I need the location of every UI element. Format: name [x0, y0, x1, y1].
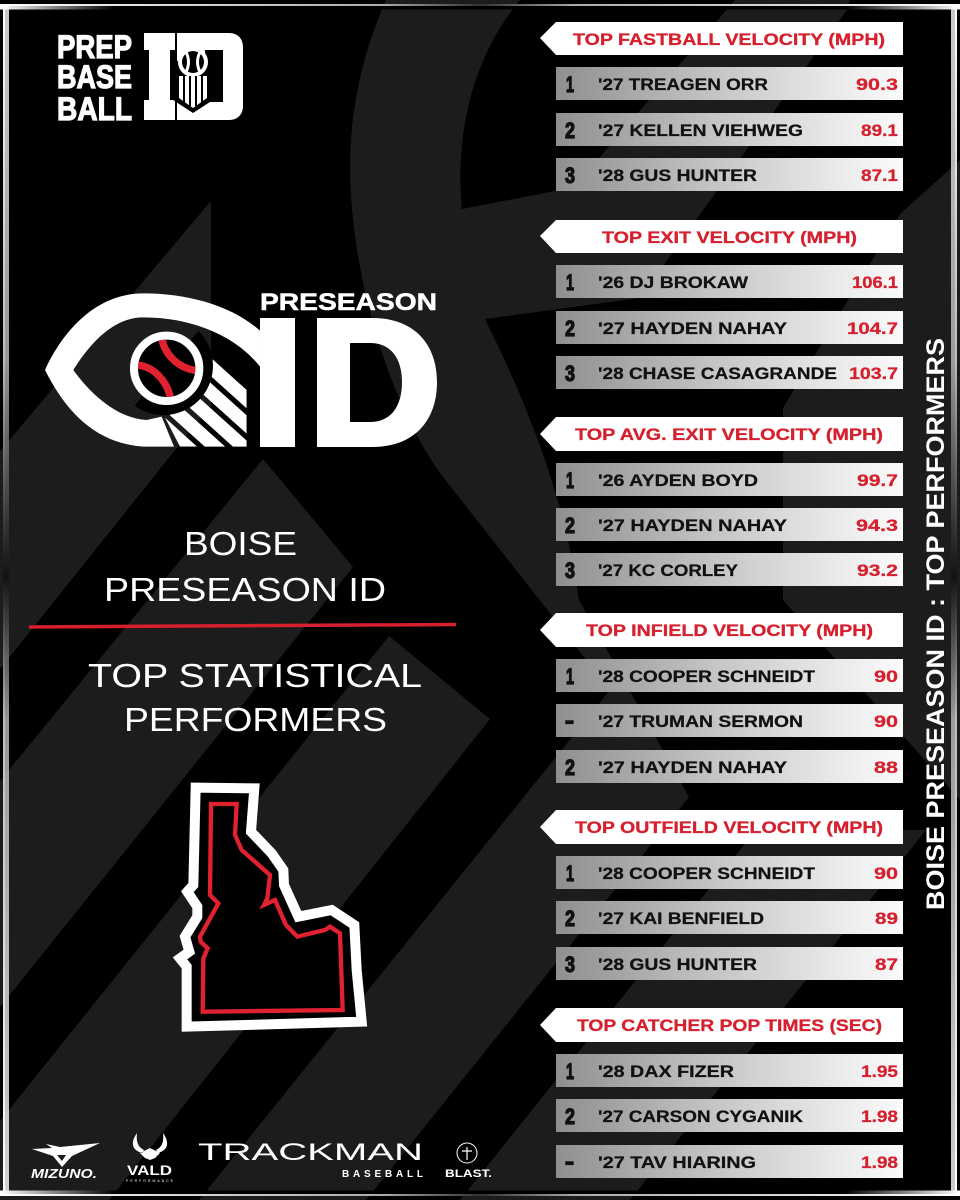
- row: Dax Fizer: [556, 1054, 903, 1087]
- row: Gus Hunter: 87: [875, 956, 898, 974]
- row: DJ Brokaw: '26 DJ BROKAW: [598, 274, 748, 292]
- subtitle: Top Statistical Performers: TOP STATISTICAL: [88, 657, 422, 694]
- row: Treagen Orr: [556, 67, 903, 100]
- row: Treagen Orr: 90.3: [856, 76, 898, 94]
- vertical title: BOISE PRESEASON ID : TOP PERFORMERS: [922, 338, 950, 910]
- row: Hayden Nahay: 88: [874, 759, 898, 777]
- row: Gus Hunter: 3: [565, 163, 575, 188]
- row: Tav Hiaring: -: [565, 1149, 574, 1174]
- row: Ayden Boyd: '26 AYDEN BOYD: [598, 472, 758, 490]
- row: DJ Brokaw: 106.1: [852, 274, 898, 292]
- row: Treagen Orr: '27 TREAGEN ORR: [598, 76, 768, 94]
- row: Gus Hunter: [556, 158, 903, 191]
- row: Hayden Nahay: [556, 750, 903, 783]
- row: Kai Benfield: 2: [565, 906, 575, 931]
- row: Hayden Nahay: [556, 508, 903, 541]
- header: top catcher pop times: [540, 1008, 903, 1042]
- panel: top fastball velocity: [540, 22, 903, 191]
- panel: top outfield velocity: [540, 810, 903, 980]
- header: top outfield velocity: TOP OUTFIELD VELOCITY (MPH): [575, 819, 883, 837]
- row: Hayden Nahay: [556, 311, 903, 344]
- row: Chase Casagrande: 3: [565, 361, 575, 386]
- row: DJ Brokaw: 1: [566, 270, 574, 295]
- logo: Trackman Baseball: [198, 1139, 423, 1180]
- row: Kellen Viehweg: 89.1: [861, 122, 898, 140]
- subtitle: Top Statistical Performers: PERFORMERS: [124, 701, 387, 738]
- logo wordmark: [57, 29, 132, 127]
- row: Hayden Nahay: '27 HAYDEN NAHAY: [598, 517, 787, 535]
- row: Kai Benfield: '27 KAI BENFIELD: [598, 910, 764, 928]
- header: top fastball velocity: [540, 22, 903, 55]
- row: Hayden Nahay: 104.7: [847, 320, 898, 338]
- row: Gus Hunter: 3: [565, 952, 575, 977]
- row: Tav Hiaring: [556, 1145, 903, 1178]
- row: Carson Cyganik: [556, 1099, 903, 1132]
- row: KC Corley: '27 KC CORLEY: [598, 562, 738, 580]
- row: Kai Benfield: 89: [875, 910, 898, 928]
- panel: top average exit velocity: [540, 417, 903, 586]
- row: Hayden Nahay: '27 HAYDEN NAHAY: [598, 759, 787, 777]
- logo: VALD Performance: VALD: [127, 1162, 172, 1178]
- panel: top infield velocity: [540, 613, 903, 783]
- row: Dax Fizer: 1.95: [861, 1063, 898, 1081]
- row: Hayden Nahay: '27 HAYDEN NAHAY: [598, 320, 787, 338]
- row: Truman Sermon: 90: [874, 713, 898, 731]
- row: Dax Fizer: 1: [566, 1059, 574, 1084]
- logo ID letters with shield: [144, 33, 243, 120]
- row: Truman Sermon: -: [565, 708, 574, 733]
- header: top exit velocity: TOP EXIT VELOCITY (MPH): [602, 229, 857, 247]
- row: Cooper Schneidt: 1: [566, 664, 574, 689]
- row: Gus Hunter: [556, 947, 903, 980]
- row: Tav Hiaring: '27 TAV HIARING: [598, 1154, 756, 1172]
- logo: VALD Performance: PERFORMANCE: [126, 1179, 174, 1183]
- logo: Trackman Baseball: TRACKMAN: [198, 1139, 423, 1166]
- header: top infield velocity: [540, 613, 903, 647]
- header: top exit velocity: [540, 220, 903, 253]
- row: Cooper Schneidt: 1: [566, 861, 574, 886]
- row: Gus Hunter: 87.1: [861, 167, 898, 185]
- letters: ID: [260, 318, 437, 447]
- logo: Mizuno: [31, 1143, 100, 1181]
- panel: top catcher pop times: [540, 1008, 903, 1178]
- row: Chase Casagrande: 103.7: [849, 365, 898, 383]
- row: Hayden Nahay: 2: [565, 755, 575, 780]
- row: Ayden Boyd: 1: [566, 468, 574, 493]
- row: Treagen Orr: 1: [566, 72, 574, 97]
- row: Kellen Viehweg: [556, 113, 903, 146]
- row: Kellen Viehweg: '27 KELLEN VIEHWEG: [598, 122, 803, 140]
- row: Chase Casagrande: '28 CHASE CASAGRANDE: [598, 365, 837, 383]
- row: Hayden Nahay: 2: [565, 316, 575, 341]
- row: Carson Cyganik: '27 CARSON CYGANIK: [598, 1108, 803, 1126]
- row: Carson Cyganik: 1.98: [861, 1108, 898, 1126]
- row: Cooper Schneidt: '28 COOPER SCHNEIDT: [598, 865, 815, 883]
- logo: Blast: BLAST.: [445, 1168, 492, 1180]
- row: Carson Cyganik: 2: [565, 1104, 575, 1129]
- row: Gus Hunter: '28 GUS HUNTER: [598, 167, 757, 185]
- logo: Preseason ID: [45, 293, 437, 447]
- icon: eye with baseball: [45, 293, 260, 447]
- header: top infield velocity: TOP INFIELD VELOCITY (MPH): [586, 622, 873, 640]
- row: KC Corley: 3: [565, 558, 575, 583]
- row: Kai Benfield: [556, 901, 903, 934]
- row: Kellen Viehweg: 2: [565, 118, 575, 143]
- header: top avg exit velocity: TOP AVG. EXIT VELOCITY (MPH): [575, 426, 883, 444]
- panel: top exit velocity: [540, 220, 903, 389]
- logo: VALD Performance: [126, 1133, 174, 1183]
- row: Cooper Schneidt: [556, 856, 903, 889]
- row: Cooper Schneidt: '28 COOPER SCHNEIDT: [598, 668, 815, 686]
- title: Boise Preseason ID: PRESEASON ID: [104, 571, 386, 608]
- logo wordmark: PREP: [57, 29, 132, 65]
- logo: Mizuno: MIZUNO.: [31, 1166, 97, 1181]
- header: top fastball velocity: TOP FASTBALL VELOCITY (MPH): [573, 31, 885, 49]
- row: Cooper Schneidt: 90: [874, 865, 898, 883]
- title: Boise Preseason ID: BOISE: [184, 525, 297, 562]
- subtitle: Top Statistical Performers: [88, 657, 422, 738]
- row: KC Corley: 93.2: [857, 562, 898, 580]
- red divider: [29, 624, 456, 627]
- row: Hayden Nahay: 2: [565, 513, 575, 538]
- row: Chase Casagrande: [556, 356, 903, 389]
- logo: Blast: [445, 1143, 492, 1180]
- logo wordmark: BASE: [57, 59, 132, 95]
- row: KC Corley: [556, 553, 903, 586]
- header: top avg exit velocity: [540, 417, 903, 451]
- header: top catcher pop times: TOP CATCHER POP TIMES (SEC): [577, 1017, 882, 1035]
- row: Cooper Schneidt: [556, 659, 903, 692]
- row: Tav Hiaring: 1.98: [861, 1154, 898, 1172]
- logo: Prep Baseball ID: [57, 29, 243, 127]
- logo wordmark: BALL: [57, 91, 132, 127]
- icon: Idaho state outline: [180, 788, 362, 1027]
- title: Boise Preseason ID: [104, 525, 386, 608]
- row: Cooper Schneidt: 90: [874, 668, 898, 686]
- sponsor logos: [31, 1133, 492, 1183]
- row: Ayden Boyd: 99.7: [857, 472, 898, 490]
- header: top outfield velocity: [540, 810, 903, 844]
- logo: Trackman Baseball: BASEBALL: [342, 1169, 423, 1180]
- row: Gus Hunter: '28 GUS HUNTER: [598, 956, 757, 974]
- row: DJ Brokaw: [556, 265, 903, 298]
- row: Hayden Nahay: 94.3: [856, 517, 898, 535]
- row: Ayden Boyd: [556, 463, 903, 496]
- row: Dax Fizer: '28 DAX FIZER: [598, 1063, 734, 1081]
- row: Truman Sermon: [556, 704, 903, 737]
- word: PRESEASON: PRESEASON: [260, 289, 437, 316]
- row: Truman Sermon: '27 TRUMAN SERMON: [598, 713, 803, 731]
